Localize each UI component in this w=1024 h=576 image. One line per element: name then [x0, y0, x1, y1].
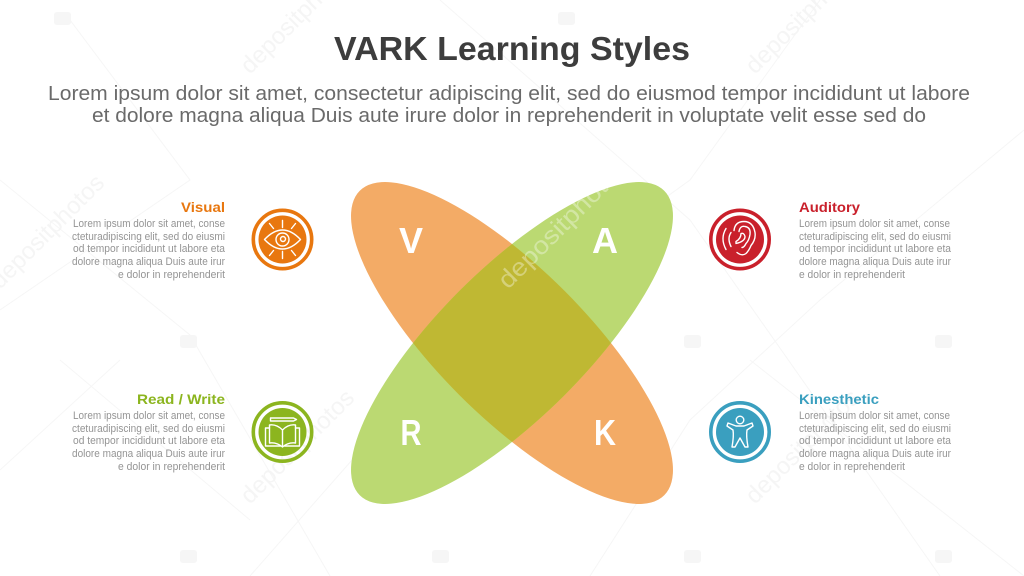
icon: eye [253, 210, 312, 269]
text block: Read / Write: dolore magna aliqua Duis aute irur [72, 448, 225, 460]
subtitle text: et dolore magna aliqua Duis aute irure dolor in reprehenderit in voluptate velit esse sed do [92, 105, 926, 127]
ellipse: Visual and Kinesthetic (orange) [307, 138, 717, 548]
letter A: A [592, 220, 618, 261]
text block: Kinesthetic: cteturadipiscing elit, sed do eiusmi [799, 423, 951, 435]
text block: Read / Write [72, 410, 225, 473]
ellipse overlap [413, 244, 611, 442]
icon: book and pencil [253, 403, 312, 461]
heading: Kinesthetic: Kinesthetic [799, 391, 879, 407]
text block: Read / Write: Lorem ipsum dolor sit amet, conse [73, 410, 225, 422]
text block: Visual [72, 218, 225, 281]
text block: Kinesthetic: od tempor incididunt ut labore eta [799, 435, 951, 447]
text block: Read / Write: od tempor incididunt ut labore eta [73, 435, 225, 447]
panel: Read / Write [72, 391, 312, 473]
text block: Auditory: e dolor in reprehenderit [799, 269, 905, 281]
text block: Visual: od tempor incididunt ut labore eta [73, 243, 225, 255]
text block: Read / Write: cteturadipiscing elit, sed do eiusmi [72, 423, 225, 435]
text block: Auditory: Lorem ipsum dolor sit amet, conse [799, 218, 950, 230]
text block: Visual: dolore magna aliqua Duis aute irur [72, 256, 225, 268]
panel: Kinesthetic [711, 391, 951, 473]
text block: Auditory: cteturadipiscing elit, sed do eiusmi [799, 231, 951, 243]
ellipse: Auditory and Read / Write (green) [307, 138, 717, 548]
text block: Kinesthetic: Lorem ipsum dolor sit amet, conse [799, 410, 950, 422]
text block: Kinesthetic: dolore magna aliqua Duis aute irur [799, 448, 951, 460]
text: depositphotos [740, 384, 865, 509]
icon: ear [711, 210, 769, 269]
text block: Auditory: dolore magna aliqua Duis aute irur [799, 256, 951, 268]
letter R: R [400, 412, 422, 453]
letter V: V [399, 220, 423, 261]
chart: VARK crossed ellipses [351, 182, 673, 504]
text: depositphotos [235, 384, 360, 509]
heading: Read / Write: Read / Write [137, 391, 225, 407]
title: VARK Learning Styles [334, 30, 690, 67]
subtitle text: Lorem ipsum dolor sit amet, consectetur adipiscing elit, sed do eiusmod tempor incididunt ut labore [48, 83, 970, 105]
text block: Kinesthetic [799, 410, 951, 473]
letter K: K [594, 412, 616, 453]
text block: Visual: cteturadipiscing elit, sed do eiusmi [72, 231, 225, 243]
subtitle text [48, 83, 970, 127]
heading: Visual: Visual [181, 199, 225, 215]
panel: Visual [72, 199, 312, 281]
text block: Kinesthetic: e dolor in reprehenderit [799, 461, 905, 473]
icon: person [711, 403, 769, 461]
watermark on chart: depositphotos [492, 153, 634, 294]
text block: Auditory [799, 218, 951, 281]
panel: Auditory [711, 199, 951, 281]
heading: Auditory: Auditory [799, 199, 860, 215]
text block: Visual: Lorem ipsum dolor sit amet, conse [73, 218, 225, 230]
text block: Visual: e dolor in reprehenderit [118, 269, 225, 281]
text block: Auditory: od tempor incididunt ut labore eta [799, 243, 951, 255]
text block: Read / Write: e dolor in reprehenderit [118, 461, 225, 473]
